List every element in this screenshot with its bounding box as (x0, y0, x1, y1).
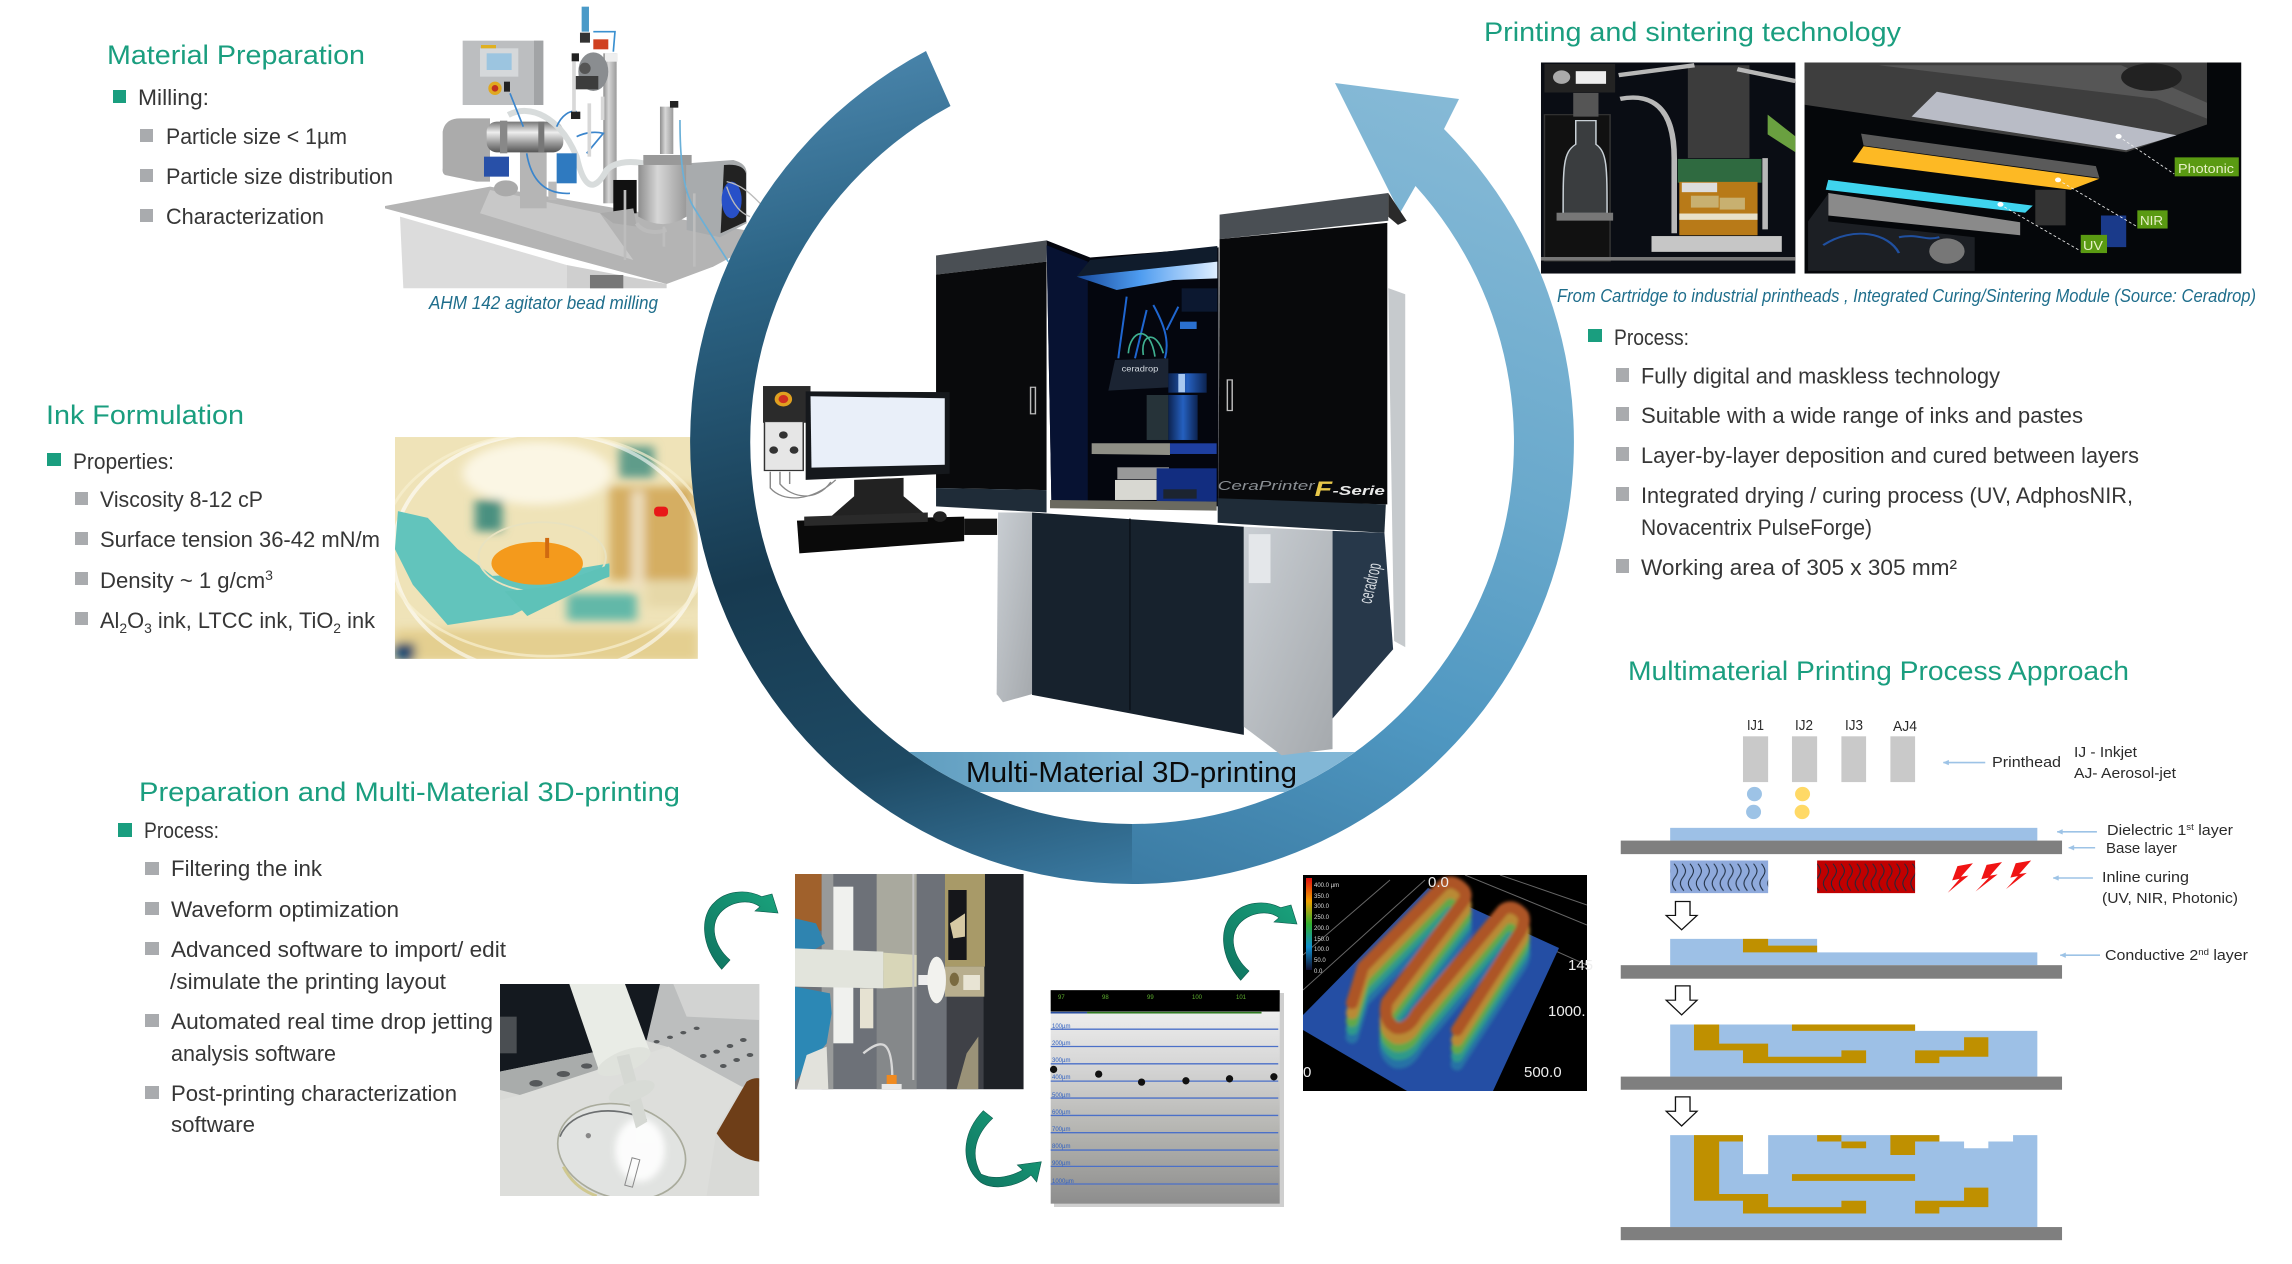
bullet list: milling (113, 85, 393, 229)
control box (763, 386, 836, 498)
image: drop jetting analysis (1050, 990, 1284, 1207)
image: ceraprinter machine: ceradrop (1354, 561, 1386, 605)
image: 3d profilometer plot: 0.0 (1314, 969, 1323, 975)
image: drop jetting analysis: 300µm (1052, 1058, 1070, 1064)
bullet list: process: Process: (1614, 325, 1689, 350)
arrow: syringe to filter (704, 892, 778, 969)
image: drop jetting analysis: 101 (1236, 995, 1247, 1001)
bullet list: properties: 2 (333, 620, 341, 636)
diagram labels: Printhead (1992, 754, 2061, 771)
inline curing NIR lamp (1817, 860, 1915, 893)
image: drop jetting analysis: 99 (1147, 995, 1154, 1001)
bullet list: process: Automated real time drop jetting (171, 1009, 493, 1034)
printer front panels and monitor (763, 193, 1407, 553)
arrow: drop analysis to 3d plot (1223, 903, 1297, 980)
bullet list: process: Integrated drying / curing process (UV, AdphosNIR, (1641, 483, 2133, 508)
bullet list: properties: O (127, 608, 144, 633)
panel: printing and sintering technology (1484, 17, 2256, 580)
image: drop jetting analysis: 200µm (1052, 1041, 1070, 1047)
heading: printing and sintering: Printing and sintering technology (1484, 17, 1902, 47)
bullet list: properties: 2 (119, 620, 127, 636)
bullet list: properties: Al (100, 608, 120, 633)
bullet list: properties: Surface tension 36-42 mN/m (100, 527, 380, 552)
diagram labels: st (2186, 822, 2194, 832)
image: 3d profilometer plot: 150.0 (1314, 937, 1330, 943)
image: bead mill machine (385, 7, 763, 288)
bullet list: process: Layer-by-layer deposition and cured between layers (1641, 443, 2139, 468)
bullet list: process: Suitable with a wide range of inks and pastes (1641, 403, 2083, 428)
bullet list: process (1588, 325, 2139, 580)
right side panel (1333, 531, 1393, 719)
bullet list: process: analysis software (171, 1041, 336, 1066)
image: 3d profilometer plot: 250.0 (1314, 915, 1330, 921)
image: drop jetting analysis: 100 (1192, 995, 1203, 1001)
bullet list: process: Post-printing characterization (171, 1081, 457, 1106)
image: 3d profilometer plot (1303, 874, 1593, 1091)
label band: multi-material 3d-printing (909, 752, 1355, 792)
interior (1047, 240, 1219, 506)
bullet list: process: software (171, 1112, 255, 1137)
diagram labels: (UV, NIR, Photonic) (2102, 890, 2238, 907)
printer brand label: CeraPrinter (1218, 479, 1316, 494)
process arrow 1 (1666, 901, 1697, 930)
bullet list: properties (47, 449, 380, 636)
diagram labels: AJ- Aerosol-jet (2074, 765, 2177, 782)
photonic lightning bolts (1948, 860, 2031, 893)
stage 2 layers (1621, 939, 2062, 979)
caption: bead mill: AHM 142 agitator bead milling (428, 293, 658, 313)
bullet list: milling: Characterization (166, 204, 324, 229)
diagram labels: Base layer (2106, 840, 2177, 857)
bullet list: milling: Milling: (138, 85, 209, 110)
image: printhead cartridge (1541, 62, 1795, 274)
printer interior detail (1050, 246, 1217, 511)
image: drop jetting analysis: 100µm (1052, 1024, 1070, 1030)
bullet list: properties: 3 (144, 620, 152, 636)
printheads (1743, 736, 1915, 782)
image: drop jetting analysis: 900µm (1052, 1161, 1070, 1167)
stage 4 layers (1621, 1135, 2062, 1240)
image: 3d profilometer plot: 300.0 (1314, 904, 1330, 910)
diagram labels: Dielectric 1 (2107, 822, 2181, 839)
image: 3d profilometer plot: 1000. (1548, 1003, 1586, 1020)
panel: ink formulation (46, 400, 711, 674)
image: 3d profilometer plot: 100.0 (1314, 947, 1330, 953)
stage 3 layers (1621, 1024, 2062, 1090)
image: drop jetting analysis: 1000µm (1052, 1179, 1074, 1185)
bullet list: milling: Particle size < 1µm (166, 124, 347, 149)
circular arrow ring (690, 51, 1574, 884)
bullet list: process: Waveform optimization (171, 897, 399, 922)
panel: material preparation (107, 7, 763, 313)
image: gloved hand holding ink dish (394, 437, 698, 659)
bullet list: process: Advanced software to import/ edit (171, 937, 506, 962)
image: 3d profilometer plot: 0 (1303, 1064, 1311, 1081)
image: drop jetting analysis: 600µm (1052, 1110, 1070, 1116)
right door (1220, 193, 1388, 239)
left leg (997, 513, 1032, 702)
bullet list: process: Process: (144, 818, 219, 843)
diagram labels (1747, 717, 2248, 964)
heading: multimaterial process: Multimaterial Printing Process Approach (1628, 656, 2129, 686)
image: drop jetting analysis: 800µm (1052, 1144, 1070, 1150)
bullet list: process: Filtering the ink (171, 856, 323, 881)
image: 3d profilometer plot: 400.0 µm (1314, 883, 1339, 889)
image: 3d profilometer plot: 350.0 (1314, 894, 1330, 900)
bullet list: properties: 3 (265, 567, 273, 583)
image: ceraprinter machine (936, 240, 1405, 755)
bullet list: properties: ink (341, 608, 376, 633)
diagram labels: layer (2209, 947, 2248, 964)
droplets (1746, 787, 1810, 819)
image: drop jetting analysis: 400µm (1052, 1075, 1070, 1081)
bullet list: process: /simulate the printing layout (170, 969, 446, 994)
diagram labels: AJ4 (1893, 718, 1917, 735)
diagram labels: IJ1 (1747, 717, 1764, 734)
diagram labels: layer (2194, 822, 2233, 839)
diagram labels: Inline curing (2102, 869, 2189, 886)
image: drop jetting analysis: 700µm (1052, 1127, 1070, 1133)
image: drop jetting analysis: 98 (1102, 995, 1109, 1001)
bullet list: properties: ink, LTCC ink, TiO (152, 608, 333, 633)
bullet list: properties: Viscosity 8-12 cP (100, 487, 263, 512)
keyboard shelf (797, 511, 997, 553)
printer front panels and monitor: -Serie (1333, 484, 1385, 499)
bullet list: properties: Density ~ 1 g/cm (100, 568, 264, 593)
right side column (1388, 288, 1405, 647)
heading: ink formulation: Ink Formulation (46, 400, 244, 430)
panel: multimaterial printing process approach (1621, 656, 2248, 1240)
label text: multi-material 3d-printing: Multi-Material 3D-printing (966, 757, 1297, 789)
label: nir: NIR (2140, 213, 2163, 228)
image: 3d profilometer plot: 200.0 (1314, 926, 1330, 932)
image: filter on syringe (795, 874, 1024, 1089)
heading: material preparation: Material Preparation (107, 40, 365, 70)
diagram labels: IJ - Inkjet (2074, 744, 2138, 761)
image: syringe over glass dish (500, 984, 759, 1214)
image: 3d profilometer plot: 0.0 (1428, 874, 1449, 891)
diagram labels: IJ3 (1845, 717, 1863, 734)
printer front panels and monitor: F (1315, 477, 1333, 501)
bullet list: milling: Particle size distribution (166, 164, 393, 189)
pointer arrows (1943, 760, 2100, 958)
panel: preparation and multi-material 3d-printing (118, 777, 1593, 1214)
inline curing UV lamp (1670, 860, 1768, 893)
diagram labels: nd (2198, 947, 2209, 957)
image: curing sintering module (1805, 62, 2241, 274)
cabinet base (1032, 513, 1244, 735)
process arrow 3 (1666, 1097, 1697, 1126)
arrow: filter to drop analysis (966, 1111, 1041, 1187)
image: drop jetting analysis: 500µm (1052, 1093, 1070, 1099)
monitor (806, 391, 950, 517)
stage 1 layers (1621, 828, 2062, 854)
bullet list: process: Fully digital and maskless technology (1641, 364, 2000, 388)
diagram: printheads and layer stack (1621, 736, 2100, 1240)
right leg (1244, 527, 1333, 755)
image: drop jetting analysis: 97 (1058, 995, 1065, 1001)
image: 3d profilometer plot: 50.0 (1314, 958, 1326, 964)
label: photonic: Photonic (2178, 161, 2235, 176)
image: 3d profilometer plot: 145 (1568, 957, 1593, 974)
heading: preparation and multi-material: Preparation and Multi-Material 3D-printing (139, 777, 680, 807)
bullet list: process (118, 818, 506, 1137)
image: 3d profilometer plot: 500.0 (1524, 1064, 1562, 1081)
bullet list: process: Working area of 305 x 305 mm² (1641, 555, 1957, 580)
process arrow 2 (1666, 986, 1697, 1015)
diagram labels: Conductive 2 (2105, 947, 2193, 964)
printer interior detail: ceradrop (1122, 364, 1159, 374)
left door (936, 240, 1047, 275)
bullet list: process: Novacentrix PulseForge) (1641, 515, 1872, 540)
label: uv: UV (2083, 238, 2103, 253)
bullet list: properties: Properties: (73, 449, 174, 474)
diagram labels: IJ2 (1795, 717, 1813, 734)
